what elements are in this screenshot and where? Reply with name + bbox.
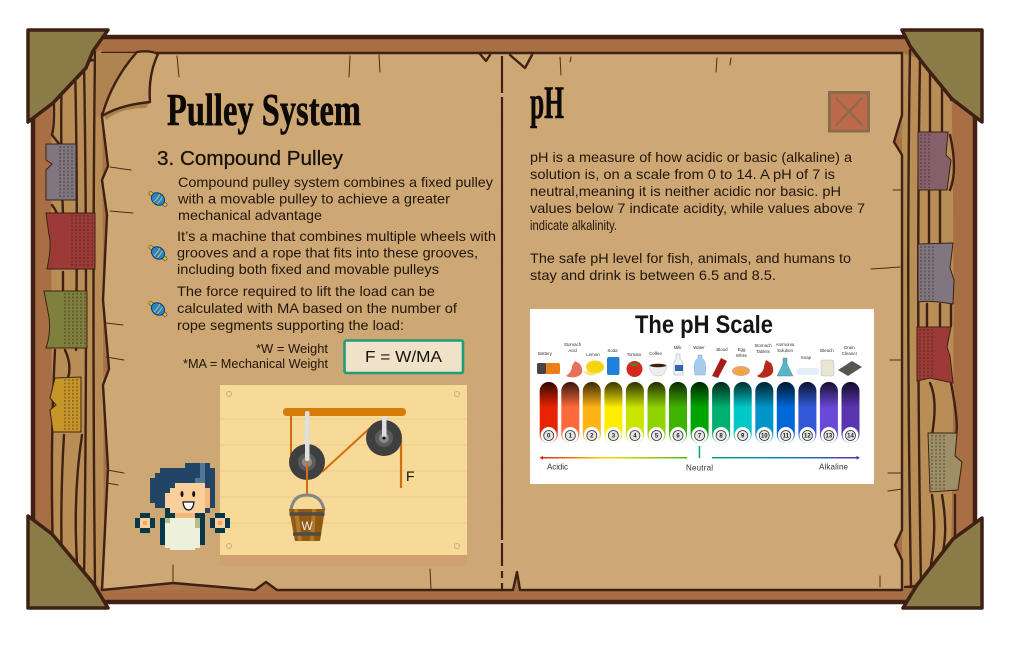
tube 3: 3 bbox=[612, 434, 616, 440]
coffee cup bbox=[649, 364, 667, 376]
blood tube bbox=[712, 358, 727, 378]
item labels: Stomach bbox=[564, 342, 582, 347]
tab: red bbox=[46, 213, 95, 269]
page tears and stitches bbox=[106, 55, 902, 589]
left tabs bbox=[44, 144, 95, 432]
item labels: Egg bbox=[738, 347, 746, 352]
text 2: including both fixed and movable pulleys bbox=[177, 261, 439, 277]
item labels: Stomach bbox=[754, 343, 772, 348]
flask bbox=[777, 358, 793, 376]
item labels: Ammonia bbox=[776, 342, 795, 347]
pH description: solution is, on a scale from 0 to 14. A pH of 7 is bbox=[530, 166, 835, 182]
milk bottle bbox=[674, 354, 683, 375]
tube 13 bbox=[820, 382, 838, 443]
text 1: mechanical advantage bbox=[178, 207, 322, 223]
item labels: Battery bbox=[538, 351, 553, 356]
text 3: calculated with MA based on the number of bbox=[177, 300, 457, 316]
chart title: The pH Scale bbox=[635, 311, 773, 339]
item labels: White bbox=[736, 353, 748, 358]
tube 9 bbox=[734, 382, 752, 443]
scale labels: Alkaline bbox=[819, 462, 849, 472]
tube 7: 7 bbox=[698, 434, 702, 440]
item labels: Water bbox=[693, 345, 705, 350]
lemon bbox=[583, 360, 604, 376]
bleach jug bbox=[821, 360, 834, 376]
item labels bbox=[538, 342, 858, 360]
bullet 3 bbox=[146, 298, 170, 320]
pH tubes bbox=[540, 382, 860, 443]
bucket: W bbox=[301, 519, 313, 533]
text 1 bbox=[177, 174, 493, 223]
paper spread bbox=[102, 53, 902, 590]
tab: olive bbox=[44, 291, 87, 348]
bucket bbox=[289, 495, 325, 541]
tube 14 bbox=[842, 382, 860, 443]
bullet list bbox=[146, 174, 496, 333]
safe pH text: stay and drink is between 6.5 and 8.5. bbox=[530, 267, 776, 283]
tube 12: 12 bbox=[804, 434, 811, 440]
formula box: F = W/MA bbox=[365, 349, 442, 366]
item labels: Bleach bbox=[820, 348, 834, 353]
corner: bottom right bbox=[903, 518, 982, 608]
spine bbox=[480, 54, 532, 590]
pH description: indicate alkalinity. bbox=[530, 217, 617, 233]
left page stack bbox=[51, 50, 104, 590]
tube 5: 5 bbox=[655, 434, 659, 440]
pixel character bbox=[135, 463, 230, 550]
tube 10: 10 bbox=[761, 434, 768, 440]
item labels: Cleaner bbox=[842, 351, 858, 356]
title: pH: pH bbox=[530, 77, 564, 129]
soap bbox=[797, 368, 819, 375]
corner: top right bbox=[902, 30, 982, 122]
right hand bbox=[210, 513, 230, 533]
pH scale chart bbox=[530, 309, 874, 484]
item labels: Blood bbox=[716, 347, 728, 352]
stomach tablets bbox=[757, 360, 773, 378]
acidic arrow bbox=[540, 456, 687, 460]
tube 13: 13 bbox=[826, 434, 833, 440]
tab: yellow bbox=[50, 377, 81, 432]
corner: bottom left bbox=[28, 516, 108, 608]
mouth bbox=[183, 502, 194, 510]
water bottle bbox=[694, 355, 706, 375]
formula legend: *W = Weight bbox=[256, 342, 329, 356]
text 3: The force required to lift the load can be bbox=[177, 283, 435, 299]
soda can bbox=[607, 357, 620, 375]
tube 0 bbox=[540, 382, 558, 443]
tube 8: 8 bbox=[719, 434, 723, 440]
tab: gray bbox=[46, 144, 76, 200]
fixed pulley bbox=[366, 416, 402, 456]
hair bbox=[150, 463, 215, 513]
text 2 bbox=[177, 228, 496, 277]
text 1: with a movable pulley to achieve a greater bbox=[177, 190, 450, 206]
tube 4: 4 bbox=[633, 434, 637, 440]
cheek shade bbox=[205, 488, 210, 508]
tube 4 bbox=[626, 382, 644, 443]
tube 7 bbox=[691, 382, 709, 443]
pH description: pH is a measure of how acidic or basic (alkaline) a bbox=[530, 149, 852, 165]
label F: F bbox=[406, 468, 415, 484]
tube 6 bbox=[669, 382, 687, 443]
tube 5 bbox=[648, 382, 666, 443]
tube 2: 2 bbox=[590, 434, 594, 440]
formula legend bbox=[183, 342, 329, 371]
tube 8 bbox=[712, 382, 730, 443]
hair highlight bbox=[195, 463, 205, 483]
face bbox=[165, 483, 205, 513]
item labels: Soap bbox=[801, 355, 812, 360]
scale labels: Neutral bbox=[686, 464, 713, 472]
shirt bbox=[160, 518, 205, 550]
item labels: Tomato bbox=[627, 352, 642, 357]
item labels: Tablets bbox=[756, 349, 771, 354]
title: Pulley System: Pulley System bbox=[167, 84, 361, 135]
pH description bbox=[530, 149, 865, 233]
scale labels: Acidic bbox=[547, 462, 568, 472]
safe pH text bbox=[530, 250, 851, 283]
corner: top left bbox=[28, 30, 108, 122]
text 3: rope segments supporting the load: bbox=[177, 317, 404, 333]
tomato bbox=[626, 361, 642, 377]
tube 10 bbox=[755, 382, 773, 443]
neck and collar bbox=[165, 508, 205, 518]
drain sink bbox=[838, 361, 862, 376]
text 3 bbox=[177, 283, 457, 333]
tube 0: 0 bbox=[547, 434, 551, 440]
tab: red right bbox=[917, 327, 953, 383]
item labels: Drain bbox=[844, 345, 855, 350]
egg bbox=[732, 366, 750, 376]
battery bbox=[537, 363, 560, 374]
pH description: neutral,meaning it is neither acidic nor basic. pH bbox=[530, 183, 841, 199]
movable pulley bbox=[289, 411, 325, 495]
pulley diagram board bbox=[220, 385, 467, 566]
item labels: Milk bbox=[674, 345, 682, 350]
scale labels bbox=[547, 462, 849, 472]
item icons bbox=[537, 354, 862, 378]
tube 12 bbox=[798, 382, 816, 443]
formula box bbox=[344, 340, 463, 373]
page curl bbox=[96, 51, 158, 120]
bullet 2 bbox=[146, 242, 170, 264]
ropes bbox=[291, 416, 401, 488]
item labels: Solution bbox=[777, 348, 793, 353]
text 1: Compound pulley system combines a fixed pulley bbox=[178, 174, 493, 190]
tube 3 bbox=[604, 382, 622, 443]
tube 14: 14 bbox=[847, 434, 854, 440]
text 2: grooves and a rope that fits into these grooves, bbox=[177, 244, 478, 260]
tube 1 bbox=[561, 382, 579, 443]
tab: khaki bbox=[928, 433, 962, 492]
bullet 1 bbox=[146, 188, 170, 210]
pH description: values below 7 indicate acidity, while values above 7 bbox=[530, 200, 865, 216]
item labels: Coffee bbox=[649, 351, 662, 356]
tube 6: 6 bbox=[676, 434, 680, 440]
tube 1: 1 bbox=[569, 434, 573, 440]
left hand bbox=[135, 513, 155, 533]
tube 11: 11 bbox=[783, 434, 790, 440]
safe pH text: The safe pH level for fish, animals, and humans to bbox=[530, 250, 851, 266]
right page stack bbox=[902, 50, 957, 590]
beam bbox=[283, 408, 406, 416]
tab: gray right bbox=[918, 243, 954, 304]
item labels: Acid bbox=[568, 348, 577, 353]
eyes bbox=[180, 491, 195, 497]
tab: mauve bbox=[918, 132, 951, 190]
alkaline arrow bbox=[712, 456, 860, 460]
close button bbox=[830, 92, 868, 131]
item labels: Soda bbox=[607, 348, 618, 353]
tube 11 bbox=[777, 382, 795, 443]
tube 9: 9 bbox=[741, 434, 745, 440]
text 2: It’s a machine that combines multiple wheels with bbox=[177, 228, 496, 244]
stomach bbox=[566, 361, 582, 377]
item labels: Lemon bbox=[586, 352, 600, 357]
tube 2 bbox=[583, 382, 601, 443]
neutral marker bbox=[699, 446, 700, 458]
heading: Compound Pulley: 3. Compound Pulley bbox=[157, 148, 343, 170]
formula legend: *MA = Mechanical Weight bbox=[183, 357, 329, 371]
right tabs bbox=[917, 132, 962, 492]
